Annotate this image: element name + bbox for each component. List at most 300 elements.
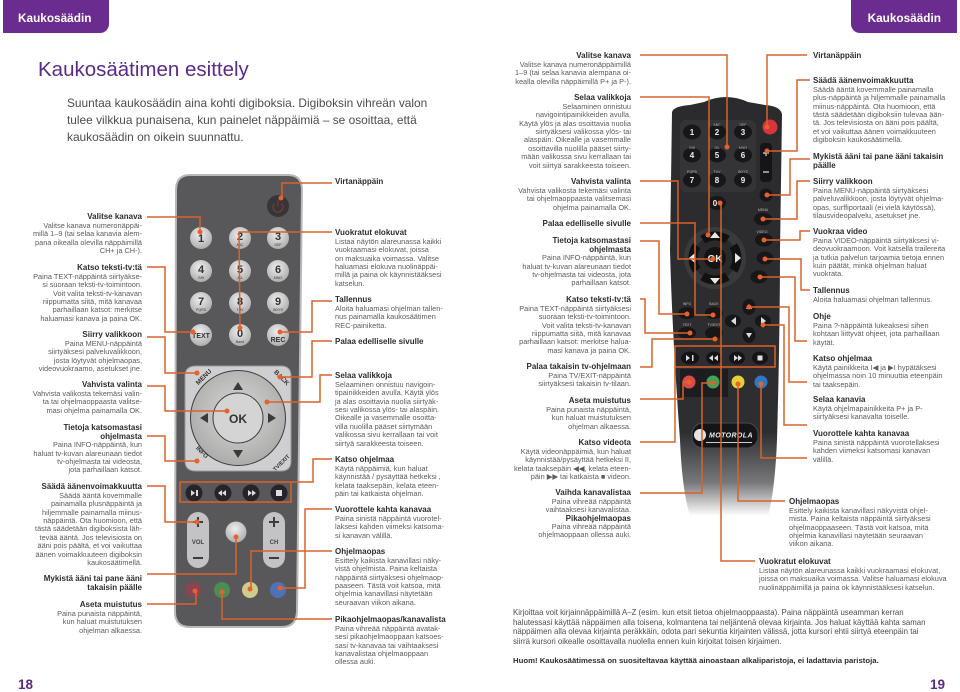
Säädä äänenvoimakkuutta: plus-näppäintä ja hiljemmalle painamalla <box>813 93 945 102</box>
Tallennus <box>813 286 932 304</box>
Säädä äänenvoimakkuutta: digiboksin kaukosäätimellä. <box>813 135 902 144</box>
coloured buttons <box>185 582 286 598</box>
connector lines: left remote <box>147 183 332 619</box>
volume and channel rockers: VOL <box>192 540 204 546</box>
Palaa takaisin tv-ohjelmaan: siirtyäksesi takaisin tv-tilaan. <box>538 379 631 388</box>
Säädä äänenvoimakkuutta: hiljemmalle painamalla miinus- <box>42 508 142 517</box>
Selaa valikkoja <box>334 371 439 448</box>
connector: Tallennus <box>762 256 810 290</box>
power and side buttons: VIDEO <box>757 230 768 234</box>
Vuokraa video: ja tutkia palvelun tarjoamia tietoja ennen <box>813 253 944 262</box>
Ohjelmaopas: ohjelmia kanavillasi näytetään <box>335 589 433 598</box>
Ohje: Ohje <box>813 312 831 321</box>
Tietoja katsomastasi ohjelmasta: jota parhaillaan katsot. <box>69 465 142 474</box>
Vuokratut elokuvat <box>335 228 442 288</box>
connector: Vuorottele <box>278 509 332 590</box>
number buttons: 4 <box>198 264 205 276</box>
number buttons: 8 <box>237 296 243 308</box>
Katso teksti-tv: parhaillaan katsot: merkitse halua- <box>519 337 631 346</box>
Aseta muistutus: Paina punaista näppäintä, <box>546 405 631 414</box>
connector: Aseta muistutus <box>147 588 198 604</box>
power and side buttons: MENU <box>758 208 769 212</box>
connector: Katso ohjelmaa <box>746 304 807 382</box>
power and side buttons <box>750 120 778 284</box>
Tietoja katsomastasi ohjelmasta: Tietoja katsomastasi <box>63 423 142 432</box>
Katso videota: Käytä videonäppäimiä, kun haluat <box>521 447 631 456</box>
Aseta muistutus: ohjelman alkaessa. <box>79 626 142 635</box>
Tietoja katsomastasi ohjelmasta: Tietoja katsomastasi <box>552 236 631 245</box>
connector: Katso teksti-tv <box>640 299 692 336</box>
Motorola badge: MOTOROLA <box>709 432 753 440</box>
left page tab <box>3 0 109 33</box>
keypad: TUV <box>714 170 721 174</box>
number buttons: TUV <box>236 308 244 312</box>
Selaa valikkoja: osoittavilla nuolilla pääset siirty- <box>528 144 631 153</box>
intro text: tulee vilkkua punaisena, kun painelet näppäimiä – se osoittaa, että <box>67 113 417 127</box>
number buttons: Band <box>236 340 244 344</box>
connector: Vuokraa video <box>762 231 810 242</box>
Katso teksti-tv: masi kanava ja paina OK. <box>547 346 631 355</box>
Palaa takaisin tv-ohjelmaan: Palaa takaisin tv-ohjelmaan <box>526 362 631 371</box>
Selaa valikkoja: voit siirtyä sarakkeesta toiseen. <box>529 161 631 170</box>
Ohjelmaopas <box>789 497 931 548</box>
Vahvista valinta: tai ohjelmaoppaasta valitsemasi <box>527 194 631 203</box>
Ohjelmaopas: ohjelmia kanavillasi näytetään seuraavan <box>789 531 923 540</box>
Tallennus: Tallennus <box>813 286 850 295</box>
video buttons <box>681 352 768 364</box>
connector: Ohjelmaopas <box>248 551 332 592</box>
number buttons <box>190 227 289 346</box>
keypad: 3 <box>741 128 746 137</box>
Selaa kanavia: Selaa kanavia <box>813 395 865 404</box>
letter entry instructions: halutessasi käyttää näppäimen alla toisena, kolmantena tai neljäntenä olevaa kirjainta. Jos haluat käyttää kahta saman <box>513 618 926 627</box>
Tietoja katsomastasi ohjelmasta: ohjelmasta <box>589 245 631 254</box>
transport buttons <box>186 484 288 502</box>
Katso videota: käynnistää/pysäyttää hetkeksi II, <box>525 455 631 464</box>
Säädä äänenvoimakkuutta: kaukosäätimellä. <box>87 558 142 567</box>
Siirry valikkoon: Paina MENU-näppäintä siirtyäksesi <box>813 186 928 195</box>
Katso teksti-tv: Katso teksti-tv:tä <box>566 295 631 304</box>
coloured buttons <box>680 369 768 397</box>
column 1 text: millä 1–9 (tai selaa kanavia alem- <box>33 229 142 238</box>
connector: Katso videota with box <box>640 346 775 442</box>
connector: Siirry valikkoon <box>760 181 810 222</box>
Ohjelmaopas: Ohjelmaopas <box>789 497 839 506</box>
Säädä äänenvoimakkuutta: painamalla plusnäppäintä ja <box>51 499 142 508</box>
Vuokratut elokuvat: millä ja paina ok käynnistääksesi <box>335 270 442 279</box>
Katso teksti-tv: parhaillaan katsot: merkitse <box>53 305 142 314</box>
connector: Säädä <box>147 486 200 524</box>
connector: Selaa kanavia <box>760 322 807 425</box>
Säädä äänenvoimakkuutta <box>813 76 946 144</box>
Katso ohjelmaa: Katso ohjelmaa <box>335 455 394 464</box>
Katso teksti-tv: si suoraan teksti-tv-toimintoon. <box>42 280 142 289</box>
Säädä äänenvoimakkuutta: tevää ääntä. Jos televisiosta on <box>40 533 142 542</box>
Säädä äänenvoimakkuutta: et voi vaikuttaa äänen voimakkuuteen <box>813 127 936 136</box>
Vuokratut elokuvat: Vuokratut elokuvat <box>759 557 831 566</box>
connector: Vuokratut elokuvat <box>718 200 755 561</box>
Selaa valikkoja: siirtyäksesi valikossa ylös- tai <box>536 127 631 136</box>
connector: Mykistä <box>147 534 238 574</box>
left remote control <box>175 175 302 627</box>
Pikaohjelmaopas/kanavalista <box>335 615 446 666</box>
column 1 text <box>33 212 142 255</box>
Vaihda kanavalistaa: vaihtaaksesi kanavalistaa. <box>546 505 631 514</box>
lower function buttons: BACK <box>709 302 719 306</box>
Ohje <box>813 312 940 347</box>
Katso ohjelmaa: kelata taaksepäin, kelata eteen- <box>335 481 439 490</box>
column 1 text: Valitse kanava numeronäppäi- <box>43 221 142 230</box>
Katso ohjelmaa: ohjelmassa noin 10 minuuttia eteenpäin <box>813 371 942 380</box>
Säädä äänenvoimakkuutta: tästä säädetään digiboksiin tulevaa ään- <box>813 110 944 119</box>
number buttons: 9 <box>275 296 281 308</box>
Palaa takaisin tv-ohjelmaan <box>526 362 631 388</box>
Vuokratut elokuvat: joissa on maksuaika voimassa. Valitse haluamasi elokuva <box>759 574 947 583</box>
Aseta muistutus: kun haluat muistutuksen <box>63 617 142 626</box>
Palaa takaisin tv-ohjelmaan: Paina TV/EXIT-näppäintä <box>548 371 631 380</box>
column 4: Virtanäppäin: Virtanäppäin <box>813 51 861 60</box>
Vahvista valinta: Vahvista valinta <box>82 380 142 389</box>
Tietoja katsomastasi ohjelmasta: tv-ohjelmasta tai videosta, <box>57 457 142 466</box>
Katso teksti-tv <box>519 295 631 355</box>
connector: Vuorottele <box>758 382 807 458</box>
Siirry valikkoon: palveluvalikkoon, josta löytyvät ohjelma- <box>813 194 944 203</box>
Vahvista valinta: Vahvista valikosta tekemäsi valinta <box>518 186 631 195</box>
Selaa valikkoja: mään valikossa sivu kerrallaan tai <box>521 152 631 161</box>
Vaihda kanavalistaa: Pikaohjelmaopas <box>566 514 631 523</box>
connector: Tallennus <box>278 301 332 334</box>
Selaa valikkoja: Selaa valikkoja <box>574 93 631 102</box>
Säädä äänenvoimakkuutta: Säädä äänenvoimakkuutta <box>813 76 913 85</box>
Säädä äänenvoimakkuutta: Säädä ääntä kovemmalle painamalla <box>813 85 933 94</box>
number buttons: 1 <box>198 233 204 245</box>
keypad: 1 <box>690 128 695 137</box>
Säädä äänenvoimakkuutta: Säädä äänenvoimakkuutta <box>42 482 142 491</box>
Katso teksti-tv: Voit valita teksti-tv-kanavan <box>53 289 142 298</box>
Säädä äänenvoimakkuutta: näppäintä. Ota huomioon, että <box>43 516 142 525</box>
keypad <box>680 120 756 210</box>
Katso ohjelmaa: Käytä painikkeita I◀ ja ▶I hypätäksesi <box>813 363 937 372</box>
Vaihda kanavalistaa: ohjelmaoppaan ollessa auki. <box>538 530 631 539</box>
connector: Selaa valikkoja <box>640 97 710 238</box>
connector: Vaihda kanavalistaa <box>640 380 716 493</box>
Katso videota <box>514 438 631 481</box>
Selaa kanavia: Käytä ohjelmapainikkeita P+ ja P- <box>813 404 923 413</box>
connector: Ohjelmaopas <box>736 382 785 501</box>
Tietoja katsomastasi ohjelmasta <box>522 236 631 287</box>
Mykistä ääni <box>44 574 142 592</box>
letter entry instructions <box>513 608 926 647</box>
Tietoja katsomastasi ohjelmasta: tv-ohjelmasta tai videosta, jota <box>532 270 631 279</box>
Vahvista valinta: Vahvista valinta <box>571 177 631 186</box>
Säädä äänenvoimakkuutta: miinus-näppäintä. Ota huomioon, että <box>813 102 935 111</box>
number buttons: REC <box>271 337 285 344</box>
connector: Säädä <box>764 80 810 154</box>
connector: Aseta muistutus <box>640 380 692 399</box>
lower function buttons: TV/EXIT <box>707 323 721 327</box>
keypad: DEF <box>740 123 746 127</box>
Selaa valikkoja: sesi valikossa ylös- tai alaspäin. <box>335 405 439 414</box>
keypad: WXYZ <box>738 170 749 174</box>
Aseta muistutus <box>546 396 631 431</box>
page number 18: 18 <box>18 677 33 692</box>
keypad: PQRS <box>687 170 698 174</box>
Katso ohjelmaa: käynnistää / pysäyttää hetkeksi , <box>335 472 441 481</box>
Selaa valikkoja: Selaaminen onnistuu <box>562 102 631 111</box>
Tallennus: Aloita haluamasi ohjelman tallen- <box>335 304 443 313</box>
Siirry valikkoon: josta löytyvät ohjelmaopas, <box>54 356 142 365</box>
Vuokratut elokuvat: katselun. <box>335 279 364 288</box>
Tietoja katsomastasi ohjelmasta: parhaillaan katsot. <box>571 278 631 287</box>
Vaihda kanavalistaa: Vaihda kanavalistaa <box>555 488 631 497</box>
Selaa valikkoja: navigointipainikkeiden avulla. <box>536 110 631 119</box>
Vahvista valinta: ohjelma painamalla OK. <box>553 203 631 212</box>
Vuokraa video: Vuokraa video <box>813 227 867 236</box>
connector: Siirry valikkoon <box>147 337 200 376</box>
Ohjelmaopas: Ohjelmaopas <box>335 547 385 556</box>
number buttons: TEXT <box>192 333 211 340</box>
Selaa valikkoja <box>519 93 631 170</box>
Palaa edelliselle sivulle: Palaa edelliselle sivulle <box>335 337 424 346</box>
Katso teksti-tv: Voit valita teksti-tv-kanavan <box>542 321 631 330</box>
connector: Palaa edelliselle <box>640 223 716 318</box>
navigation pad: INFO <box>194 446 209 460</box>
Ohje: kohtaan liittyvät ohjeet, jota parhaillaan <box>813 329 940 338</box>
Vuokratut elokuvat <box>758 557 947 592</box>
Vuokratut elokuvat: on maksuaika voimassa. Valitse <box>335 254 439 263</box>
Katso ohjelmaa: Katso ohjelmaa <box>813 354 872 363</box>
Vahvista valinta <box>518 177 631 212</box>
Ohjelmaopas: seuraavan viikon aikana. <box>335 598 416 607</box>
Mykistä ääni: Mykistä ääni tai pane ääni takaisin <box>813 152 943 161</box>
Siirry valikkoon: Paina MENU-näppäintä <box>65 339 142 348</box>
lower function buttons <box>678 299 771 343</box>
navigation pad: TV/EXIT <box>272 453 292 473</box>
Siirry valikkoon: Siirry valikkoon <box>813 177 873 186</box>
Tallennus: REC-painiketta. <box>335 321 386 330</box>
Vuorottele kahta kanavaa <box>813 429 940 464</box>
Aseta muistutus: Aseta muistutus <box>80 600 142 609</box>
keypad: 9 <box>741 176 746 185</box>
Ohjelmaopas: mista. Paina keltaista näppäintä siirtyäksesi <box>789 514 931 523</box>
Aseta muistutus: ohjelman alkaessa. <box>568 422 631 431</box>
connector lines: right remote <box>640 55 810 561</box>
battery note: Huom! Kaukosäätimessä on suositeltavaa käyttää ainoastaan alkaliparistoja, ei ladattavia paristoja. <box>513 656 879 665</box>
Pikaohjelmaopas/kanavalista: sesi pikaohjelmaoppaan katsoes- <box>335 632 444 641</box>
letter entry instructions: Kirjoittaa voit kirjainnäppäimillä A–Z (esim. kun etsit tietoa ohjelmaoppaasta). Paina näppäintä useamman kerran <box>513 608 904 617</box>
Tietoja katsomastasi ohjelmasta <box>33 423 142 474</box>
connector: Selaa valikkoja <box>264 375 332 404</box>
Vuokraa video <box>812 227 946 278</box>
Selaa valikkoja: Oikealle ja vasemmalle osoitta- <box>335 413 437 422</box>
Vahvista valinta: Vahvista valikosta tekemäsi valin- <box>33 389 142 398</box>
Tallennus: nus painamalla kaukosäätimen <box>335 312 436 321</box>
letter entry instructions: siirrä kursori oikealle osoittavalla nuolella ennen kuin kirjoitat toisen kirjaimen. <box>513 637 782 646</box>
number buttons: 6 <box>275 264 281 276</box>
connector: Vuokratut elokuvat <box>238 232 332 330</box>
Säädä äänenvoimakkuutta: Säädä ääntä kovemmalle <box>59 491 142 500</box>
keypad: MNO <box>739 146 747 150</box>
lower function buttons: INFO <box>683 302 691 306</box>
number buttons: 3 <box>275 231 281 243</box>
Vuorottele kahta kanavaa: Vuorottele kahta kanavaa <box>335 505 431 514</box>
Vuorottele kahta kanavaa: Paina sinistä näppäintä vuorotellaksesi <box>813 438 940 447</box>
Vuorottele kahta kanavaa: välillä. <box>813 455 833 464</box>
keypad: 7 <box>690 176 695 185</box>
Pikaohjelmaopas/kanavalista: ollessa auki. <box>335 657 375 666</box>
column 1 text: CH+ ja CH-). <box>100 246 142 255</box>
column 3: Valitse kanava: Valitse kanava numeronäppäimillä <box>520 60 631 69</box>
Vuokraa video: kuin päätät, minkä ohjelman haluat <box>813 261 926 270</box>
number buttons: 5 <box>237 264 243 276</box>
Mykistä ääni: päälle <box>813 161 836 170</box>
Vuokratut elokuvat: Listaa näytön alareunassa kaikki vuokraamasi elokuvat, <box>759 566 940 575</box>
Selaa valikkoja: valikossa sivu kerrallaan tai voit <box>335 430 438 439</box>
Palaa edelliselle sivulle: Palaa edelliselle sivulle <box>542 219 631 228</box>
Vuorottele kahta kanavaa: Paina sinistä näppäintä vuorotel- <box>335 514 442 523</box>
number buttons: 7 <box>198 296 204 308</box>
column 3: Valitse kanava: 1–9 (tai selaa kanavia alempana oi- <box>515 68 631 77</box>
connector: Virtanäppäin <box>764 55 807 130</box>
right page tab: Kaukosäädin <box>868 11 941 25</box>
Katso teksti-tv <box>33 263 142 323</box>
volume and channel rockers: CH <box>270 540 278 546</box>
Vuokratut elokuvat: Listaa näytön alareunassa kaikki <box>335 237 441 246</box>
number buttons: MNO <box>274 276 282 280</box>
Selaa valikkoja: siirtyä sarakkeesta toiseen. <box>335 439 424 448</box>
number buttons: WXYZ <box>273 308 284 312</box>
Ohje: käytät. <box>813 338 835 347</box>
column 3: Valitse kanava <box>515 51 631 86</box>
Vaihda kanavalistaa: Paina vihreää näppäintä <box>552 522 631 531</box>
right remote control <box>670 97 782 516</box>
navigation pad <box>185 366 292 473</box>
connector: Valitse kanava <box>147 217 202 234</box>
lower function buttons: TEXT <box>683 323 692 327</box>
keypad: ABC <box>713 123 721 127</box>
Ohjelmaopas: näppäintä siirtyäksesi ohjelmaop- <box>335 573 444 582</box>
title: Kaukosäätimen esittely <box>38 58 249 81</box>
Vahvista valinta: masi ohjelma painamalla OK. <box>46 406 142 415</box>
Motorola badge <box>692 423 758 448</box>
keypad: 8 <box>715 176 720 185</box>
Pikaohjelmaopas/kanavalista: Pikaohjelmaopas/kanavalista <box>335 615 446 624</box>
Selaa kanavia <box>813 395 923 421</box>
Selaa valikkoja: villa nuolilla pääset siirtymään <box>335 422 432 431</box>
Siirry valikkoon: Siirry valikkoon <box>82 330 142 339</box>
Ohjelmaopas: ohjelmaoppaaseen. Tästä voit katsoa, mitä <box>789 523 928 532</box>
Ohjelmaopas: viikon aikana. <box>789 539 834 548</box>
connector: Palaa tv-ohjelmaan <box>640 336 718 367</box>
Selaa valikkoja: ja alas osoittavia nuolia siirtyäk- <box>335 397 438 406</box>
power button <box>267 195 289 217</box>
Vuokratut elokuvat: haluamasi elokuva nuolinäppäi- <box>335 262 438 271</box>
Mykistä ääni <box>813 152 943 170</box>
Tallennus: Tallennus <box>335 295 372 304</box>
Katso teksti-tv: suoraan teksti-tv-toimintoon. <box>539 312 631 321</box>
Säädä äänenvoimakkuutta: tä. Jos televisiosta on ääni pois päältä, <box>813 118 939 127</box>
Vaihda kanavalistaa: Paina vihreää näppäintä <box>552 497 631 506</box>
Tietoja katsomastasi ohjelmasta: haluat tv-kuvan alareunaan tiedot <box>522 262 631 271</box>
intro text <box>67 96 427 144</box>
Säädä äänenvoimakkuutta: äänen voimakkuuteen digiboksin <box>35 550 142 559</box>
column 2: Virtanäppäin: Virtanäppäin <box>335 177 383 186</box>
connector: Tietoja <box>147 436 200 464</box>
Mykistä ääni: takaisin päälle <box>87 583 142 592</box>
Vuokratut elokuvat: Vuokratut elokuvat <box>335 228 407 237</box>
intro text: Suuntaa kaukosäädin aina kohti digiboksia. Digiboksin vihreän valon <box>67 96 427 110</box>
column 1 text: pana oikealla olevilla näppäimillä <box>35 238 142 247</box>
Katso teksti-tv: riippumatta siitä, mitä kanavaa <box>43 297 142 306</box>
Selaa valikkoja: Selaaminen onnistuu navigoin- <box>335 380 435 389</box>
Vuorottele kahta kanavaa: laksesi kahden viimeksi katsoma- <box>335 522 444 531</box>
Pikaohjelmaopas/kanavalista: sasi tv-kanavaa tai vaihtaaksesi <box>335 641 438 650</box>
Katso videota: kelata taaksepäin ◀◀, kelata eteen- <box>514 464 631 473</box>
connector: Valitse kanava <box>640 55 730 150</box>
keypad: 6 <box>741 151 746 160</box>
connector: Palaa edelliselle <box>278 341 332 380</box>
Vuokraa video: vuokrata. <box>813 269 843 278</box>
Ohjelmaopas: Esittely kaikista kanavillasi näky- <box>335 556 441 565</box>
keypad: 2 <box>715 128 720 137</box>
Ohjelmaopas <box>335 547 444 607</box>
Säädä äänenvoimakkuutta: tästä säädetään digiboksista läh- <box>35 524 142 533</box>
Vuokratut elokuvat: vuokraamasi elokuvat, joissa <box>335 245 429 254</box>
Katso teksti-tv: Paina TEXT-näppäintä siirtyäkse- <box>33 272 142 281</box>
Vuorottele kahta kanavaa: Vuorottele kahta kanavaa <box>813 429 909 438</box>
Ohjelmaopas: paaseen. Tästä voit katsoa, mitä <box>335 581 441 590</box>
Mykistä ääni: Mykistä ääni tai pane ääni <box>44 574 142 583</box>
right page tab <box>851 0 957 33</box>
Katso ohjelmaa <box>335 455 441 498</box>
page number 19: 19 <box>930 677 945 692</box>
connector: Vahvista valinta <box>147 386 230 414</box>
Selaa valikkoja: Käytä ylös ja alas osoittavia nuolia <box>519 119 631 128</box>
Siirry valikkoon: videovuokraamo, asetukset jne. <box>39 364 142 373</box>
Aseta muistutus <box>57 600 142 635</box>
keypad: JKL <box>714 146 720 150</box>
navigation pad: BACK <box>272 369 291 387</box>
Selaa valikkoja: alaspäin. Oikealle ja vasemmalle <box>524 135 631 144</box>
keypad: GHI <box>689 146 695 150</box>
connector: Tietoja <box>640 241 690 316</box>
navigation pad: OK <box>229 412 247 426</box>
Vahvista valinta: ta tai ohjelmaoppaasta valitse- <box>43 397 142 406</box>
connector: Pikaohjelmaopas <box>220 590 332 619</box>
Säädä äänenvoimakkuutta <box>35 482 142 567</box>
Siirry valikkoon <box>38 330 142 373</box>
Tietoja katsomastasi ohjelmasta: ohjelmasta <box>100 432 142 441</box>
Ohjelmaopas: Esittely kaikista kanavillasi näkyvistä ohjel- <box>789 506 928 515</box>
column 3: Valitse kanava: Valitse kanava <box>576 51 631 60</box>
Tietoja katsomastasi ohjelmasta: haluat tv-kuvan alareunaan tiedot <box>33 449 142 458</box>
number buttons: 0 <box>237 328 243 340</box>
Siirry valikkoon <box>813 177 944 220</box>
Vahvista valinta <box>32 380 142 415</box>
Vuokratut elokuvat: nuolinäppäimillä ja paina ok käynnistääksesi katselun. <box>759 583 935 592</box>
Vuokraa video: Paina VIDEO-näppäintä siirtyäksesi vi- <box>813 236 939 245</box>
number buttons: DEF <box>274 243 282 247</box>
left page tab: Kaukosäädin <box>18 11 91 25</box>
Vuorottele kahta kanavaa: kahden viimeksi katsomasi kanavan <box>813 446 930 455</box>
Katso ohjelmaa <box>813 354 942 389</box>
Ohje: Paina ?-näppäintä lukeaksesi sihen <box>813 321 929 330</box>
Vuorottele kahta kanavaa <box>335 505 444 540</box>
keypad: 4 <box>690 151 695 160</box>
Katso ohjelmaa: tai taaksepäin. <box>813 380 860 389</box>
connector: Katso ohjelmaa with box <box>180 459 332 502</box>
number buttons: PQRS <box>196 308 207 312</box>
